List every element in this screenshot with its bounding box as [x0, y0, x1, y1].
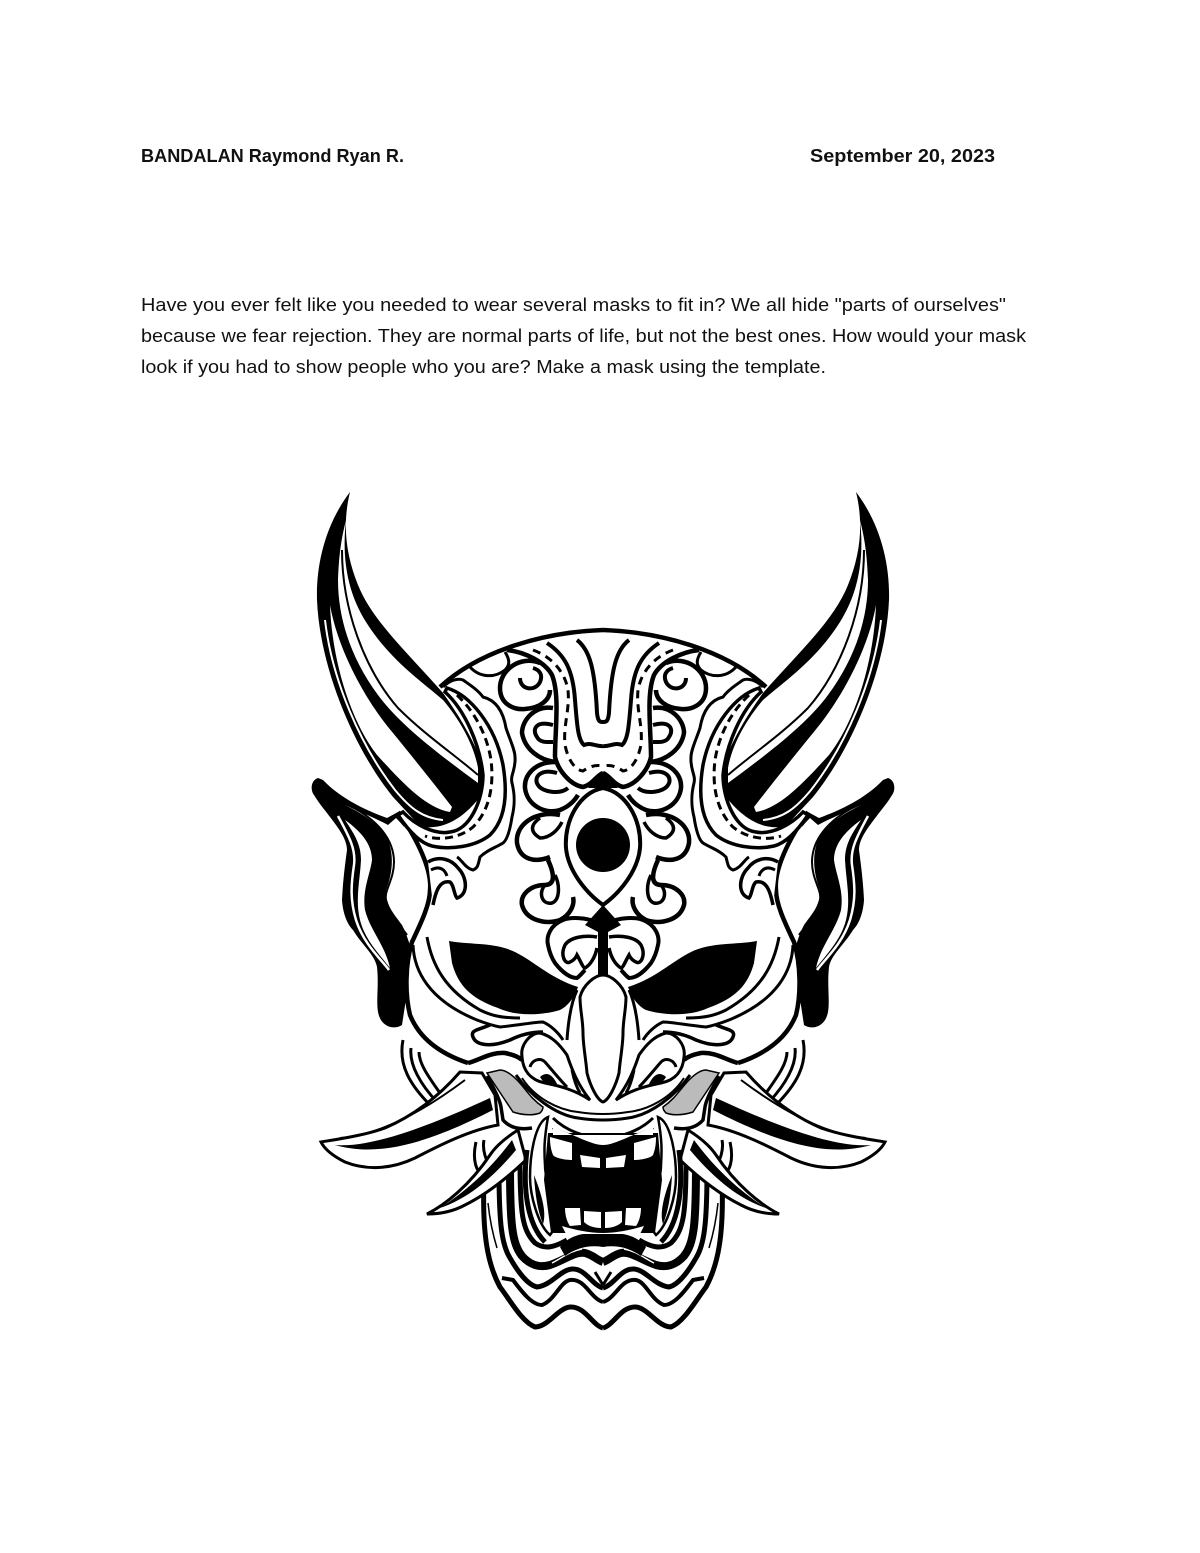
date: September 20, 2023	[810, 146, 995, 166]
instructions paragraph: look if you had to show people who you are? Make a mask using the template.	[141, 357, 826, 377]
forehead centre: third eye	[566, 772, 640, 975]
back layer: horns, ears, chin, moustache	[312, 492, 894, 1328]
instructions paragraph: because we fear rejection. They are normal parts of life, but not the best ones. How would your mask	[141, 326, 1027, 346]
student name: BANDALAN Raymond Ryan R.	[141, 146, 404, 166]
instructions paragraph	[141, 295, 1027, 377]
instructions paragraph: Have you ever felt like you needed to wear several masks to fit in? We all hide "parts of ourselves"	[141, 295, 1006, 315]
nose	[567, 975, 639, 1102]
front layer: face, forehead, brows, nostrils, fangs	[398, 630, 808, 1242]
mouth and teeth	[544, 1128, 662, 1234]
illustration: oni demon mask	[312, 492, 894, 1328]
